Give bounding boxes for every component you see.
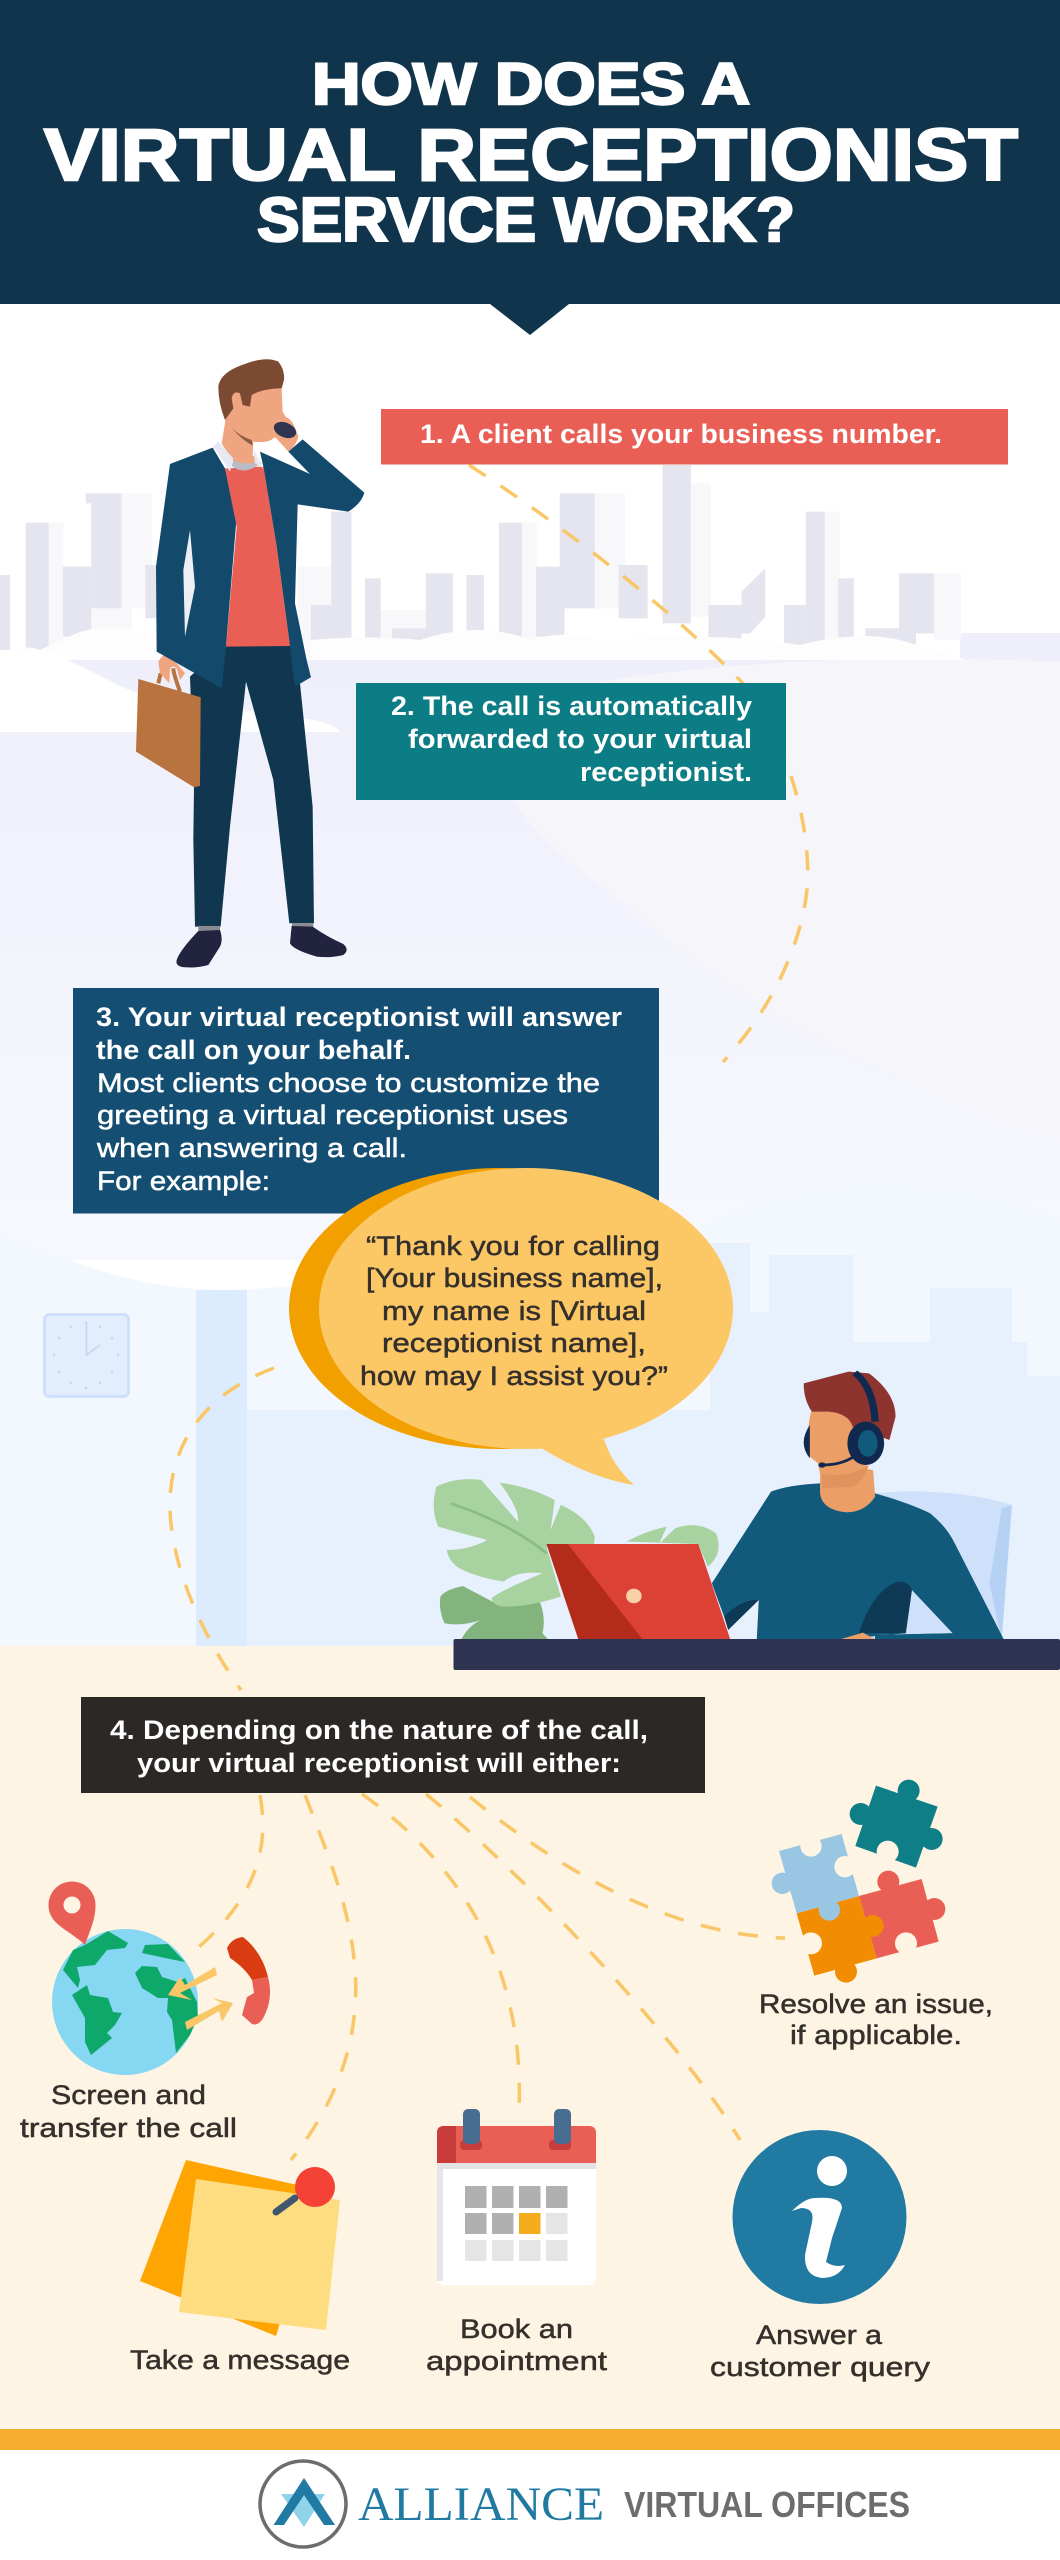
label: book an appointment: Book an [460,2314,573,2344]
icon: calendar [437,2109,596,2285]
dashed path: to info icon [426,1794,740,2140]
dashed path: step 3 to step 4 [170,1368,274,1690]
icon: puzzle pieces [772,1780,945,1983]
step 2 box: forwarded to your virtual [408,724,752,754]
orange footer bar [0,2429,1060,2450]
icon: information [732,2130,906,2304]
footer logo: ALLIANCE [358,2478,604,2531]
dashed path: to globe [192,1795,263,1953]
dashed path: to calendar [362,1794,519,2110]
label: book an appointment: appointment [426,2346,608,2376]
white clouds [0,628,967,732]
icon: sticky note with pin [140,2160,340,2336]
label: take a message: Take a message [130,2345,350,2375]
step 4 box: your virtual receptionist will either: [137,1748,621,1778]
businessman on phone [136,359,364,968]
step 4 box [81,1697,705,1793]
step 3 box: Most clients choose to customize the [97,1068,600,1098]
label: resolve an issue: if applicable. [790,2020,962,2050]
title [44,52,1018,255]
step 1 box [381,409,1008,464]
dashed path: step 1 to step 3 [469,465,808,1062]
receptionist at desk with plant and laptop [434,1372,1012,1640]
title: HOW DOES A [312,52,750,117]
speech bubble with greeting: how may I assist you?” [360,1361,668,1391]
label: book an appointment [426,2314,608,2376]
cream lower panel [0,1646,1060,2429]
header banner [0,0,1060,335]
step 4 box: 4. Depending on the nature of the call, [110,1715,648,1745]
label: resolve an issue: Resolve an issue, [759,1989,993,2019]
title: VIRTUAL RECEPTIONIST [44,115,1018,196]
dashed path: to sticky note [291,1795,356,2160]
step 3 box: when answering a call. [96,1133,407,1163]
label: screen and transfer: transfer the call [20,2113,237,2143]
step 2 box: receptionist. [580,757,752,787]
step 2 box: 2. The call is automatically [391,691,752,721]
icon: wall clock [44,1314,128,1396]
step 2 box [356,683,786,800]
speech bubble with greeting: [Your business name], [366,1263,663,1293]
label: screen and transfer [20,2080,237,2143]
step 3 box: the call on your behalf. [96,1035,411,1065]
step 3 box [73,988,659,1214]
step 1 box: 1. A client calls your business number. [420,419,942,449]
footer logo: VIRTUAL OFFICES [624,2484,910,2525]
footer logo [260,2461,910,2547]
label: answer a customer query [710,2320,931,2382]
speech bubble with greeting: receptionist name], [382,1328,646,1358]
desk [454,1639,1060,1670]
label: resolve an issue [759,1989,993,2050]
city skyline background [0,465,961,650]
step 3 box: 3. Your virtual receptionist will answer [96,1002,623,1032]
label: answer a customer query: customer query [710,2352,931,2382]
speech bubble with greeting: my name is [Virtual [382,1296,646,1326]
step 3 box: For example: [97,1166,270,1196]
lower office background [0,1184,1060,1650]
step 3 box: greeting a virtual receptionist uses [97,1100,568,1130]
icon: globe with pin and phone [48,1882,270,2075]
label: answer a customer query: Answer a [756,2320,883,2350]
speech bubble with greeting: “Thank you for calling [366,1231,660,1261]
title: SERVICE WORK? [257,186,795,255]
speech bubble with greeting [289,1168,733,1485]
label: screen and transfer: Screen and [51,2080,206,2110]
dashed path: to puzzle [470,1797,785,1938]
